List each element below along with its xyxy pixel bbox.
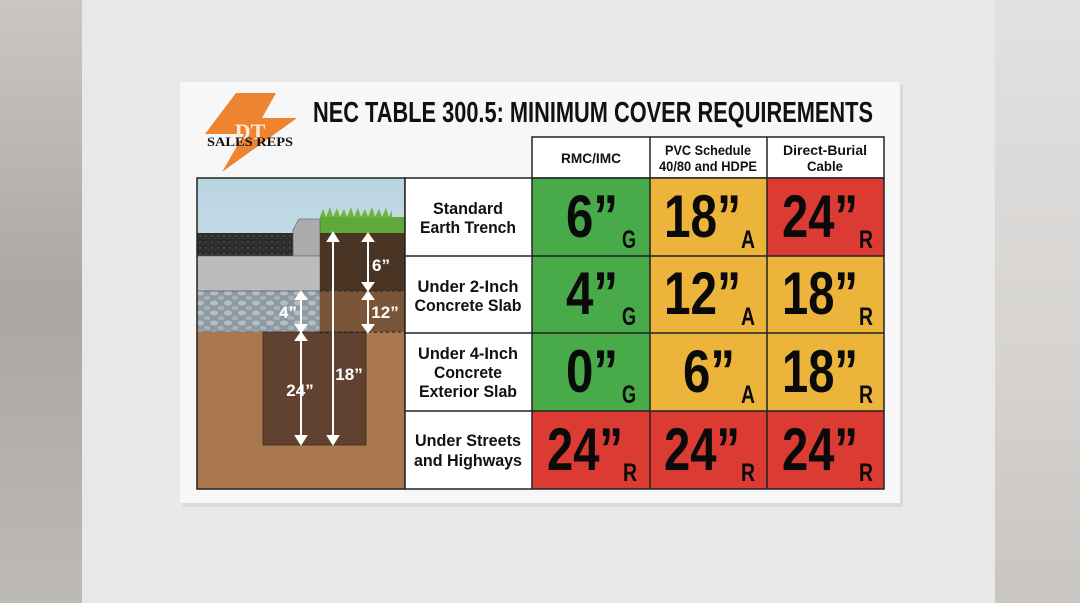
cell values: G [622,381,636,409]
diagram: trench cross-section: 6” [372,256,390,275]
cell values: 6” [683,338,735,405]
header row: Cable [807,158,843,174]
cell values: A [741,226,755,254]
cell values: R [859,226,873,254]
cell values: 0” [566,338,618,405]
header row: Direct-Burial [783,142,867,158]
cell values: 24” [782,183,858,250]
diagram: trench cross-section: 24” [286,381,314,400]
sign board [180,82,903,507]
logo: DT Sales Reps [205,93,297,172]
cell values: 6” [566,183,618,250]
table [405,137,884,489]
header row [532,137,884,178]
title: NEC TABLE 300.5: MINIMUM COVER REQUIREMENTS [313,97,873,129]
cell values: R [859,303,873,331]
row labels: Concrete [434,363,502,382]
cell values: 24” [547,416,623,483]
row labels: Under 4-Inch [418,344,518,363]
diagram: trench cross-section [197,178,405,489]
cell values: G [622,303,636,331]
cell values: R [741,459,755,487]
cells [532,178,884,489]
cell values: R [859,459,873,487]
diagram: trench cross-section: 12” [371,303,399,322]
diagram: trench cross-section: 18” [335,365,363,384]
logo: DT Sales Reps: SALES REPS [207,134,293,149]
row labels [405,178,532,489]
row labels: Concrete Slab [414,296,522,315]
row labels: Under Streets [415,431,521,450]
header row: RMC/IMC [561,150,621,166]
cell values: 24” [664,416,740,483]
cell values: G [622,226,636,254]
cell values: 18” [782,260,858,327]
row labels: Under 2-Inch [418,277,518,296]
diagram: trench cross-section: 4” [279,303,297,322]
cell values: 18” [664,183,741,250]
cell values [547,183,873,487]
logo: DT Sales Reps: DT [235,119,266,144]
cell values: A [741,303,755,331]
cell values: 18” [782,338,858,405]
cell values: 4” [566,260,618,327]
row labels: Exterior Slab [419,382,517,401]
cell values: A [741,381,755,409]
cell values: 12” [664,260,741,327]
cell values: R [623,459,637,487]
row labels: Standard [433,199,503,218]
arrows [296,233,373,444]
row labels: and Highways [414,451,522,470]
cell values: 24” [782,416,858,483]
header row: PVC Schedule [665,142,751,158]
header row: 40/80 and HDPE [659,158,757,174]
row labels: Earth Trench [420,218,516,237]
cell values: R [859,381,873,409]
